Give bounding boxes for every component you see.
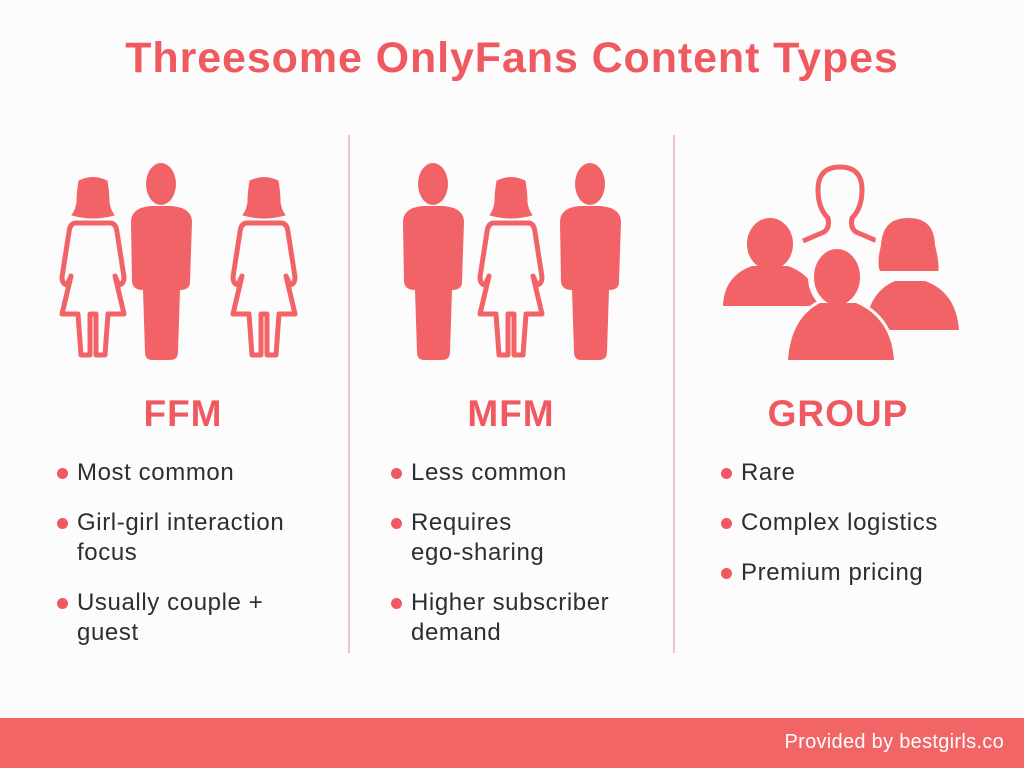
icon: group: [723, 164, 959, 360]
list: MFM: ego-sharing: [411, 539, 544, 566]
list: MFM: Requires: [411, 509, 512, 536]
icon: FFM: [60, 163, 298, 360]
list: MFM: Less common: [411, 459, 567, 486]
list: FFM: [57, 459, 284, 646]
list: MFM: Higher subscriber demand: [411, 589, 609, 646]
list: GROUP: Complex logistics: [741, 509, 938, 536]
footer: [0, 718, 1024, 768]
list: MFM: [391, 459, 609, 646]
list: GROUP: [721, 459, 938, 586]
list: FFM: Girl-girl interaction focus: [77, 509, 284, 566]
list: FFM: Most common: [77, 459, 234, 486]
list: GROUP: Rare: [741, 459, 795, 486]
heading: GROUP: GROUP: [768, 393, 908, 434]
title: Threesome OnlyFans Content Types: [125, 34, 899, 82]
list: GROUP: Premium pricing: [741, 559, 923, 586]
icon: MFM: [403, 163, 621, 360]
heading: FFM: FFM: [143, 393, 223, 434]
heading: MFM: MFM: [467, 393, 555, 434]
list: FFM: Usually couple + guest: [77, 589, 263, 646]
footer: Provided by bestgirls.co: [784, 731, 1004, 753]
